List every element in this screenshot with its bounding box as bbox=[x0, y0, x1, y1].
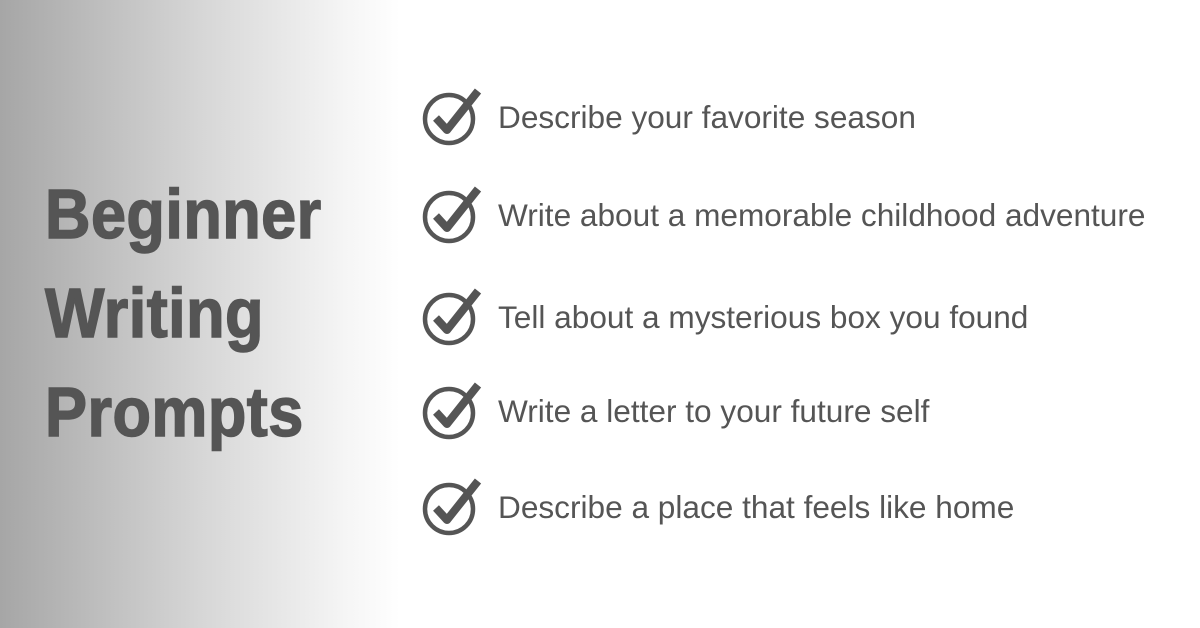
title: Prompts bbox=[45, 373, 304, 451]
item 3 bbox=[422, 288, 1028, 346]
icon: check bbox=[422, 478, 481, 536]
item 4 bbox=[422, 382, 930, 440]
item 2 bbox=[422, 186, 1145, 244]
item 5: Describe a place that feels like home bbox=[498, 489, 1014, 525]
icon: check bbox=[422, 288, 481, 346]
item 5 bbox=[422, 478, 1014, 536]
title: Writing bbox=[45, 274, 264, 352]
item 2: Write about a memorable childhood adventure bbox=[498, 197, 1145, 233]
icon: check bbox=[422, 88, 481, 146]
icon: check bbox=[422, 382, 481, 440]
title bbox=[44, 175, 322, 452]
title: Beginner bbox=[45, 175, 322, 253]
item 1 bbox=[422, 88, 916, 146]
item 4: Write a letter to your future self bbox=[498, 393, 929, 429]
item 3: Tell about a mysterious box you found bbox=[498, 299, 1028, 335]
icon: check bbox=[422, 186, 481, 244]
item 1: Describe your favorite season bbox=[498, 99, 916, 135]
